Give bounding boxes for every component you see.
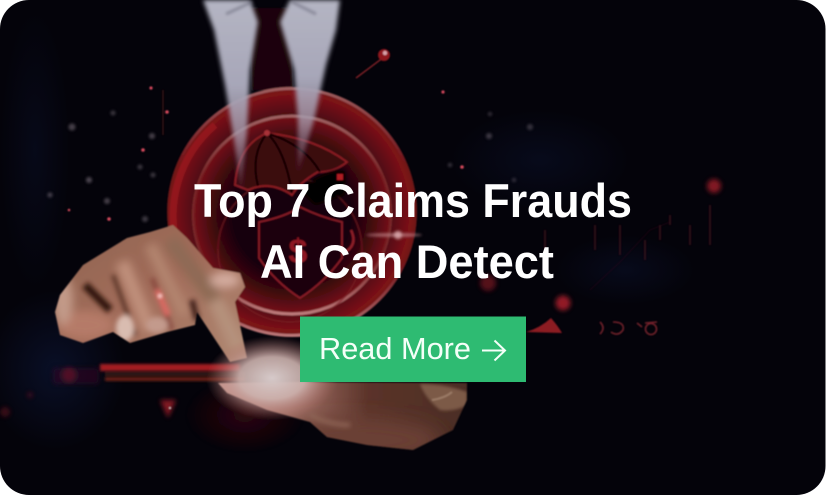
icon: shield with dollar — [259, 207, 353, 298]
heading: Top 7 Claims Frauds — [194, 174, 632, 227]
collar fold shadows — [226, 2, 316, 14]
icon: right arrow — [482, 340, 505, 360]
red glow beneath hand — [200, 392, 294, 444]
shirt collar left — [203, 0, 258, 192]
blue background haze — [6, 90, 662, 428]
faint candlestick chart — [545, 205, 710, 290]
icon: umbrella — [235, 130, 347, 205]
glowing flare — [206, 336, 338, 420]
concentric shield rings — [167, 87, 417, 337]
red glow lights — [0, 179, 721, 418]
small red glyph rings — [600, 322, 657, 334]
red mountain mark — [526, 318, 562, 333]
small red dots — [68, 86, 464, 409]
lens flare streak — [366, 231, 422, 239]
light streak on tablet — [100, 364, 245, 381]
network sparkle dots — [48, 110, 533, 222]
tie — [250, 8, 293, 90]
heading — [194, 182, 630, 278]
pointing left hand — [54, 224, 248, 363]
read more button — [300, 316, 526, 382]
heading: AI Can Detect — [260, 235, 554, 288]
read more button: Read More — [319, 332, 471, 366]
red pin — [356, 49, 390, 78]
icon: shield with dollar: $ — [289, 233, 308, 271]
shirt collar right — [280, 0, 340, 172]
lower hand — [218, 382, 468, 451]
